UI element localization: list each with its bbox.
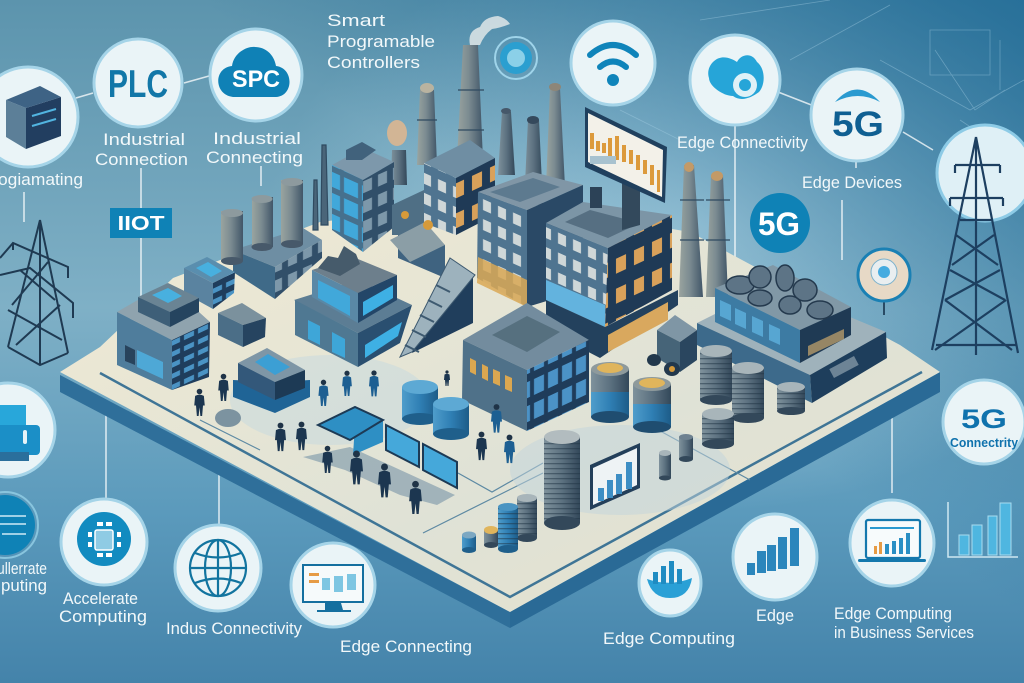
label: accelerate computing: Computing: [59, 607, 147, 626]
icon: sensor lens: [858, 249, 910, 315]
panel: chip icon left: [0, 492, 38, 558]
building: tower C with orange windows: [477, 172, 583, 307]
laptop chart on platform: [590, 443, 640, 510]
panel: PLC: [94, 39, 182, 127]
staircase block: [400, 258, 475, 357]
smoke: [469, 16, 510, 45]
building: tanks block, back left: [184, 178, 322, 309]
panel: 5G: [811, 69, 903, 161]
label: edge computing in business services: in Business Services: [834, 623, 974, 642]
panel: monitor icon: [291, 543, 375, 627]
people: [194, 370, 515, 514]
panel: edge computing chart: [639, 550, 701, 616]
label: edge connectivity: Edge Connectivity: [677, 133, 808, 152]
panel: PLC: PLC: [108, 63, 168, 106]
label: edge devices: Edge Devices: [802, 173, 902, 192]
billboard chart: [585, 107, 667, 230]
building: tower D: [546, 202, 678, 358]
label: industrial connecting: Connecting: [206, 148, 303, 167]
transmission tower right: [932, 137, 1018, 355]
label: industrial connection: Industrial: [103, 130, 185, 149]
smoke stacks behind the buildings: [313, 45, 730, 297]
panel: 5G connectivity: Connectrity: [950, 435, 1019, 450]
panel: globe: [175, 525, 261, 611]
building: blue glass block: [294, 246, 412, 367]
panel: tower circle: [937, 125, 1024, 221]
label: industrial connecting: Industrial: [213, 129, 301, 148]
label: indus connectivity: Indus Connectivity: [166, 619, 302, 638]
panel: wifi: [571, 21, 655, 105]
badge: IIOT: IIOT: [118, 213, 164, 235]
building: entrance block, left: [117, 283, 266, 390]
machinery building, right: [697, 265, 887, 403]
panel: 5G connectivity: [943, 380, 1024, 464]
panel: printer icon: [0, 383, 55, 477]
panel: 5G: 5G: [832, 105, 884, 144]
panel: 5G connectivity: 5G: [961, 404, 1007, 434]
panel: SPC cloud: [210, 29, 302, 121]
panel: edge connectivity icon: [690, 35, 780, 125]
label: accelerate computing: Accelerate: [63, 589, 138, 608]
panel: server icon: [0, 67, 78, 167]
bar chart, lower right: [948, 502, 1018, 557]
equipment console: [215, 348, 310, 427]
heading: programming label: ogiamating: [0, 170, 83, 189]
storage cylinders: [402, 345, 805, 553]
panel: accelerate computing: [61, 499, 147, 585]
building: tower A: [332, 142, 394, 252]
badge: 5G: 5G: [758, 206, 800, 242]
badge: 5G: [750, 193, 810, 253]
label: edge computing in business services: Edge Computing: [834, 604, 952, 623]
panel: edge bar chart: [733, 514, 817, 600]
operator screens: [303, 407, 457, 505]
label: industrial connection: Connection: [95, 150, 188, 169]
connector lines: [24, 76, 933, 524]
label: smart programmable controllers: Controllers: [327, 53, 420, 72]
label: edge: Edge: [756, 606, 794, 625]
label: smart programmable controllers: Smart: [327, 11, 385, 30]
small generator: [647, 315, 697, 376]
panel: SPC cloud: SPC: [232, 66, 280, 93]
factory platform: [60, 200, 940, 628]
transmission tower left: [0, 220, 73, 365]
label: edge connecting: Edge Connecting: [340, 637, 472, 656]
label: smart programmable controllers: Programable: [327, 32, 435, 51]
building: front centre: [462, 303, 589, 431]
building: tower B: [390, 140, 495, 278]
panel: laptop icon: [850, 500, 934, 586]
icon: small target: [495, 37, 537, 79]
badge: IIOT: [110, 208, 172, 238]
label: edge computing: Edge Computing: [603, 629, 735, 648]
